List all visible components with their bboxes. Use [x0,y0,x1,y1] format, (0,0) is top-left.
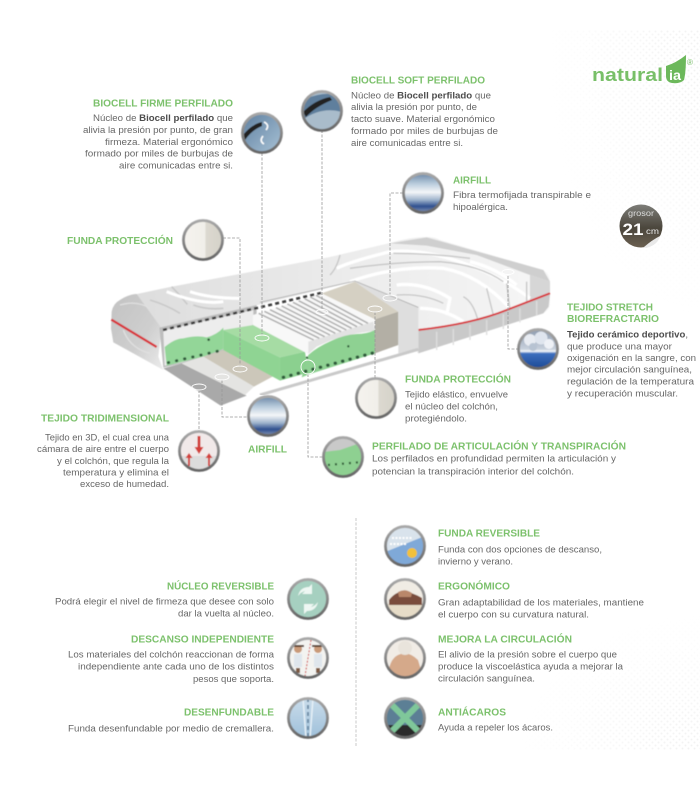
callout: Tejido tridimensional [37,414,218,490]
logo: naturalia [592,55,693,85]
text block: independiente ante cada uno de los distintos [78,662,274,672]
text block [372,454,616,478]
text block: exceso de humedad. [80,479,169,490]
callout: Biocell soft perfilado [302,76,498,149]
text block: y el colchón, que regula la [57,456,170,467]
text block: aire comunicadas entre si. [119,160,233,172]
text block: alivia la presión por punto, de gran [83,125,233,136]
text block: Núcleo de Biocell perfilado que [351,90,491,102]
icon: two sleepers [288,638,328,678]
icon: person's back [385,638,425,680]
text block [405,390,508,424]
vertical divider [355,518,357,746]
text block: oxigenación en la sangre, con [567,353,696,364]
text block: Gran adaptabilidad de los materiales, mantiene [438,598,644,608]
text block: firmeza. Material ergonómico [105,137,233,148]
icon: stretch fabric [518,330,558,368]
thickness badge: grosor 21 cm [620,204,662,248]
text block: aire comunicadas entre si. [351,138,463,149]
text block: Tejido elástico, envuelve [405,390,508,400]
callout: Funda protección left [67,220,222,260]
icon: winter and summer [385,526,425,566]
callout: Airfill upper [404,174,591,213]
text block: Funda con dos opciones de descanso, [438,544,602,556]
text block [68,650,275,685]
text block: mejor circulación sanguínea, [567,364,692,376]
text block: formado por miles de burbujas de [351,126,498,137]
text block: pesos que soporta. [193,674,274,685]
text block [37,432,170,490]
text block: regulación de la temperatura [567,376,695,388]
text block: el núcleo del colchón, [405,402,498,412]
icon: air flow arrows [180,432,218,470]
icon: cover fabric [356,378,396,418]
feature: Mejora la circulación [385,632,624,684]
callout: Tejido stretch biorefractario [518,302,696,400]
icon: cover fabric [184,220,222,260]
feature: Descanso independiente [68,634,328,685]
right part of cover: folds, band and red seam [330,237,550,353]
text block: produce la viscoelástica ayuda a mejorar la [438,662,624,672]
heading: BIOCELL FIRME PERFILADO [93,98,233,110]
heading: TEJIDO TRIDIMENSIONAL [41,414,169,424]
feature: Desenfundable [68,698,328,738]
feature: Ergonómico [385,579,644,620]
heading: FUNDA REVERSIBLE [438,528,540,540]
text block: circulación sanguínea. [438,674,535,684]
heading: MEJORA LA CIRCULACIÓN [438,632,572,646]
text block: y recuperación muscular. [567,388,678,400]
icon: crossed mite [385,698,425,738]
callout: Perfilado de articulación y transpiración [323,437,626,478]
mattress top surface [112,237,550,353]
text block: Ayuda a repeler los ácaros. [438,722,553,734]
text block: hipoalérgica. [453,202,508,213]
left part of cover: end, folds, red seam and floor layers [111,287,277,406]
text block: dar la vuelta al núcleo. [178,608,274,620]
heading: AIRFILL [453,176,491,186]
white clearing behind lower airfill icon [247,395,289,425]
logo: naturalia: ® [687,58,693,67]
text block: potencian la transpiración interior del colchón. [372,466,574,478]
text block [438,650,624,684]
left foam section and green layer [159,305,257,368]
text block: Funda desenfundable por medio de cremallera. [68,724,274,734]
slat gaps [259,295,368,340]
heading: ANTIÁCAROS [438,706,506,718]
text block [83,113,233,172]
text block: invierno y verano. [438,556,513,568]
logo: naturalia: natural [592,64,663,85]
callout: Funda protección right [356,372,511,424]
text block [55,596,274,620]
heading: AIRFILL [248,444,287,456]
heading: DESENFUNDABLE [184,708,274,718]
text block: El alivio de la presión sobre el cuerpo que [438,650,617,660]
heading [567,302,659,325]
icon: airfill [248,396,288,436]
text block: Núcleo de Biocell perfilado que [93,113,233,124]
thickness badge: grosor 21 cm: 21 [622,220,644,239]
heading: DESCANSO INDEPENDIENTE [131,634,274,646]
logo: naturalia: ia [669,67,681,83]
feature: Núcleo reversible [55,580,328,620]
text block [453,190,591,213]
text block: Los materiales del colchón reaccionan de forma [68,650,275,660]
text block: alivia la presión por punto, de [351,102,477,113]
icon: soft foam [302,91,342,131]
heading: BIOCELL SOFT PERFILADO [351,76,485,86]
text block: Podrá elegir el nivel de firmeza que desee con solo [55,596,274,608]
text block [567,330,696,400]
text block: que produce una mayor [567,342,673,352]
text block: temperatura y elimina el [63,468,169,478]
icon: body on mattress [385,579,425,619]
heading: NÚCLEO REVERSIBLE [167,580,274,592]
callout: Biocell firme perfilado [83,98,282,172]
thickness badge: grosor 21 cm: cm [646,226,659,236]
icon: reversible arrows [288,580,328,618]
heading: PERFILADO DE ARTICULACIÓN Y TRANSPIRACIÓN [372,440,626,452]
center green block [223,325,308,381]
text block: protegiéndolo. [405,414,467,424]
text block: formado por miles de burbujas de [85,148,233,160]
callout: Airfill lower [248,396,288,456]
text block: Los perfilados en profundidad permiten la articulación y [372,454,616,464]
heading: FUNDA PROTECCIÓN [67,234,173,247]
icon: airfill [404,174,442,212]
text block: Tejido en 3D, el cual crea una [45,432,170,444]
icon: zipper [288,698,328,738]
comb edge of the foam [163,293,321,330]
text block: tacto suave. Material ergonómico [351,114,495,125]
mattress cutaway illustration [111,237,550,406]
connectors between callouts and mattress layers [192,130,519,457]
text block [438,598,644,620]
heading: TEJIDO STRETCH [567,302,653,314]
feature: Funda reversible [385,526,602,568]
text block: cámara de aire entre el cuerpo [37,444,169,455]
text block [438,544,602,568]
feature: Antiácaros [385,698,553,738]
heading: BIOREFRACTARIO [567,314,659,325]
slats, right green layer and end layers [253,281,418,395]
text block: el cuerpo con su curvatura natural. [438,610,589,620]
thickness badge: grosor 21 cm: grosor [628,208,654,218]
text block: Tejido cerámico deportivo, [567,330,688,340]
icon: profiled foam [323,437,363,477]
text block: Fibra termofijada transpirable e [453,190,591,201]
text block [351,90,498,149]
heading: ERGONÓMICO [438,580,510,592]
heading: FUNDA PROTECCIÓN [405,372,511,386]
icon: firm foam [242,113,282,153]
